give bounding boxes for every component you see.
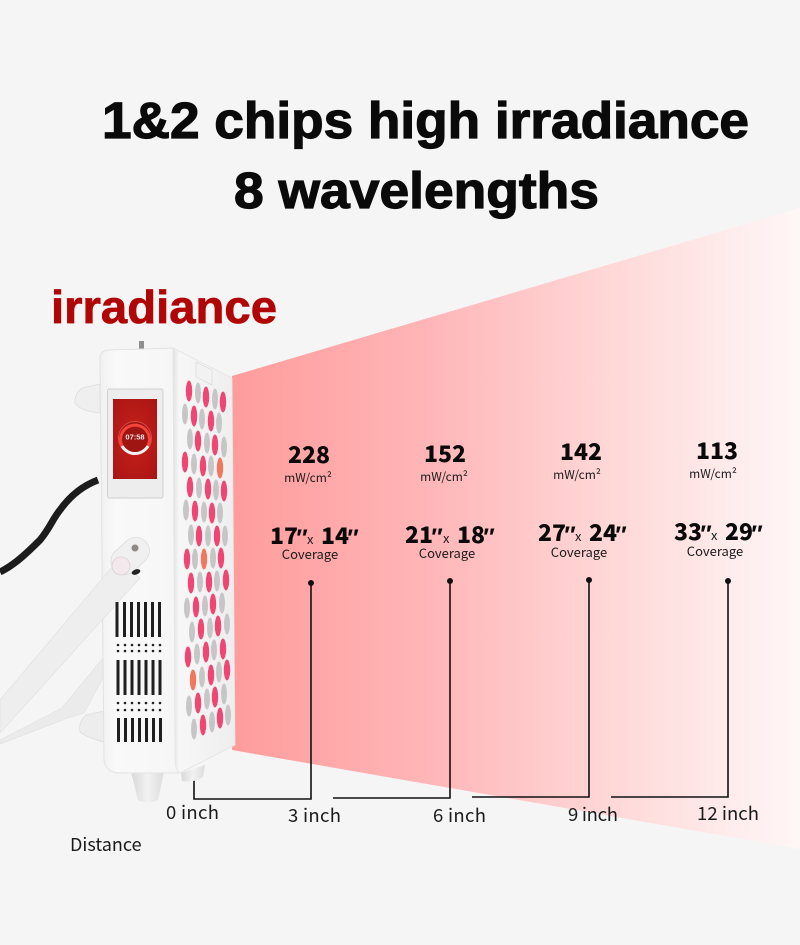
distance connector lines (194, 578, 730, 799)
data column: 12 inch: Coverage (687, 541, 743, 560)
data column: 9 inch (538, 433, 627, 561)
data column: 9 inch: ″ (563, 522, 576, 549)
data column: 3 inch: 14 (321, 517, 349, 551)
data column: 6 inch: 21 (405, 516, 433, 550)
title: 8 wavelengths (234, 162, 599, 219)
power cable (0, 480, 98, 572)
data column: 12 inch: x (711, 525, 718, 544)
data column: 3 inch: ″ (295, 525, 308, 552)
data column: 9 inch: mW/cm² (553, 466, 601, 483)
data column: 9 inch: x (575, 526, 582, 545)
upper knob (75, 384, 100, 413)
data column: 3 inch: 17 (270, 517, 298, 551)
distance labels: 3 inch (288, 802, 341, 828)
data column: 12 inch: ″ (699, 521, 712, 548)
data column: 3 inch: 228 (288, 436, 330, 470)
data column: 6 inch: ″ (430, 524, 443, 551)
data column: 6 inch: 18 (457, 516, 485, 550)
distance labels: 6 inch (433, 802, 486, 828)
data column: 9 inch: ″ (614, 522, 627, 549)
data column: 6 inch: 152 (424, 435, 466, 469)
title (102, 92, 749, 219)
stand upper leg and hinge (0, 532, 155, 733)
data column: 9 inch: 142 (560, 433, 602, 467)
data column: 6 inch: x (443, 528, 450, 547)
touch screen (113, 399, 157, 479)
data column: 6 inch (405, 435, 495, 562)
device: red light therapy panel (0, 341, 235, 802)
data column: 3 inch: x (307, 529, 314, 548)
data column: 9 inch: Coverage (551, 542, 607, 561)
data column: 12 inch (674, 432, 763, 560)
light beam (232, 208, 800, 849)
data column: 12 inch: 113 (696, 432, 738, 466)
data column: 9 inch: 27 (538, 514, 566, 548)
data column: 3 inch (270, 436, 359, 563)
LED array (182, 380, 231, 740)
data column: 6 inch: mW/cm² (420, 468, 468, 485)
data column: 6 inch: ″ (482, 524, 495, 551)
data column: 12 inch: 33 (674, 513, 702, 547)
bottom feet (131, 772, 164, 802)
title: 1&2 chips high irradiance (102, 92, 749, 149)
distance labels: 0 inch (166, 799, 219, 825)
data column: 3 inch: Coverage (282, 544, 338, 563)
touch screen bezel (108, 389, 163, 498)
distance labels: 9 inch (568, 801, 618, 827)
vent dots (117, 644, 161, 711)
data column: 12 inch: 29 (725, 513, 753, 547)
top connector (139, 341, 144, 349)
data column: 12 inch: mW/cm² (689, 465, 737, 482)
distance labels (70, 799, 759, 857)
distance labels: 12 inch (697, 800, 759, 826)
vent slots (117, 602, 160, 742)
distance labels: Distance (70, 831, 142, 857)
data column: 9 inch: 24 (589, 514, 617, 548)
touch screen: 07:58 (125, 432, 145, 442)
rear stand lower leg (0, 658, 103, 744)
heading: irradiance: irradiance (51, 281, 277, 333)
front LED face (173, 348, 235, 773)
data column: 3 inch: ″ (346, 525, 359, 552)
model label (196, 362, 212, 385)
data column: 6 inch: Coverage (419, 543, 475, 562)
lower knob (80, 711, 104, 742)
data column: 12 inch: ″ (750, 521, 763, 548)
data column: 3 inch: mW/cm² (284, 469, 332, 486)
side face (100, 348, 178, 773)
